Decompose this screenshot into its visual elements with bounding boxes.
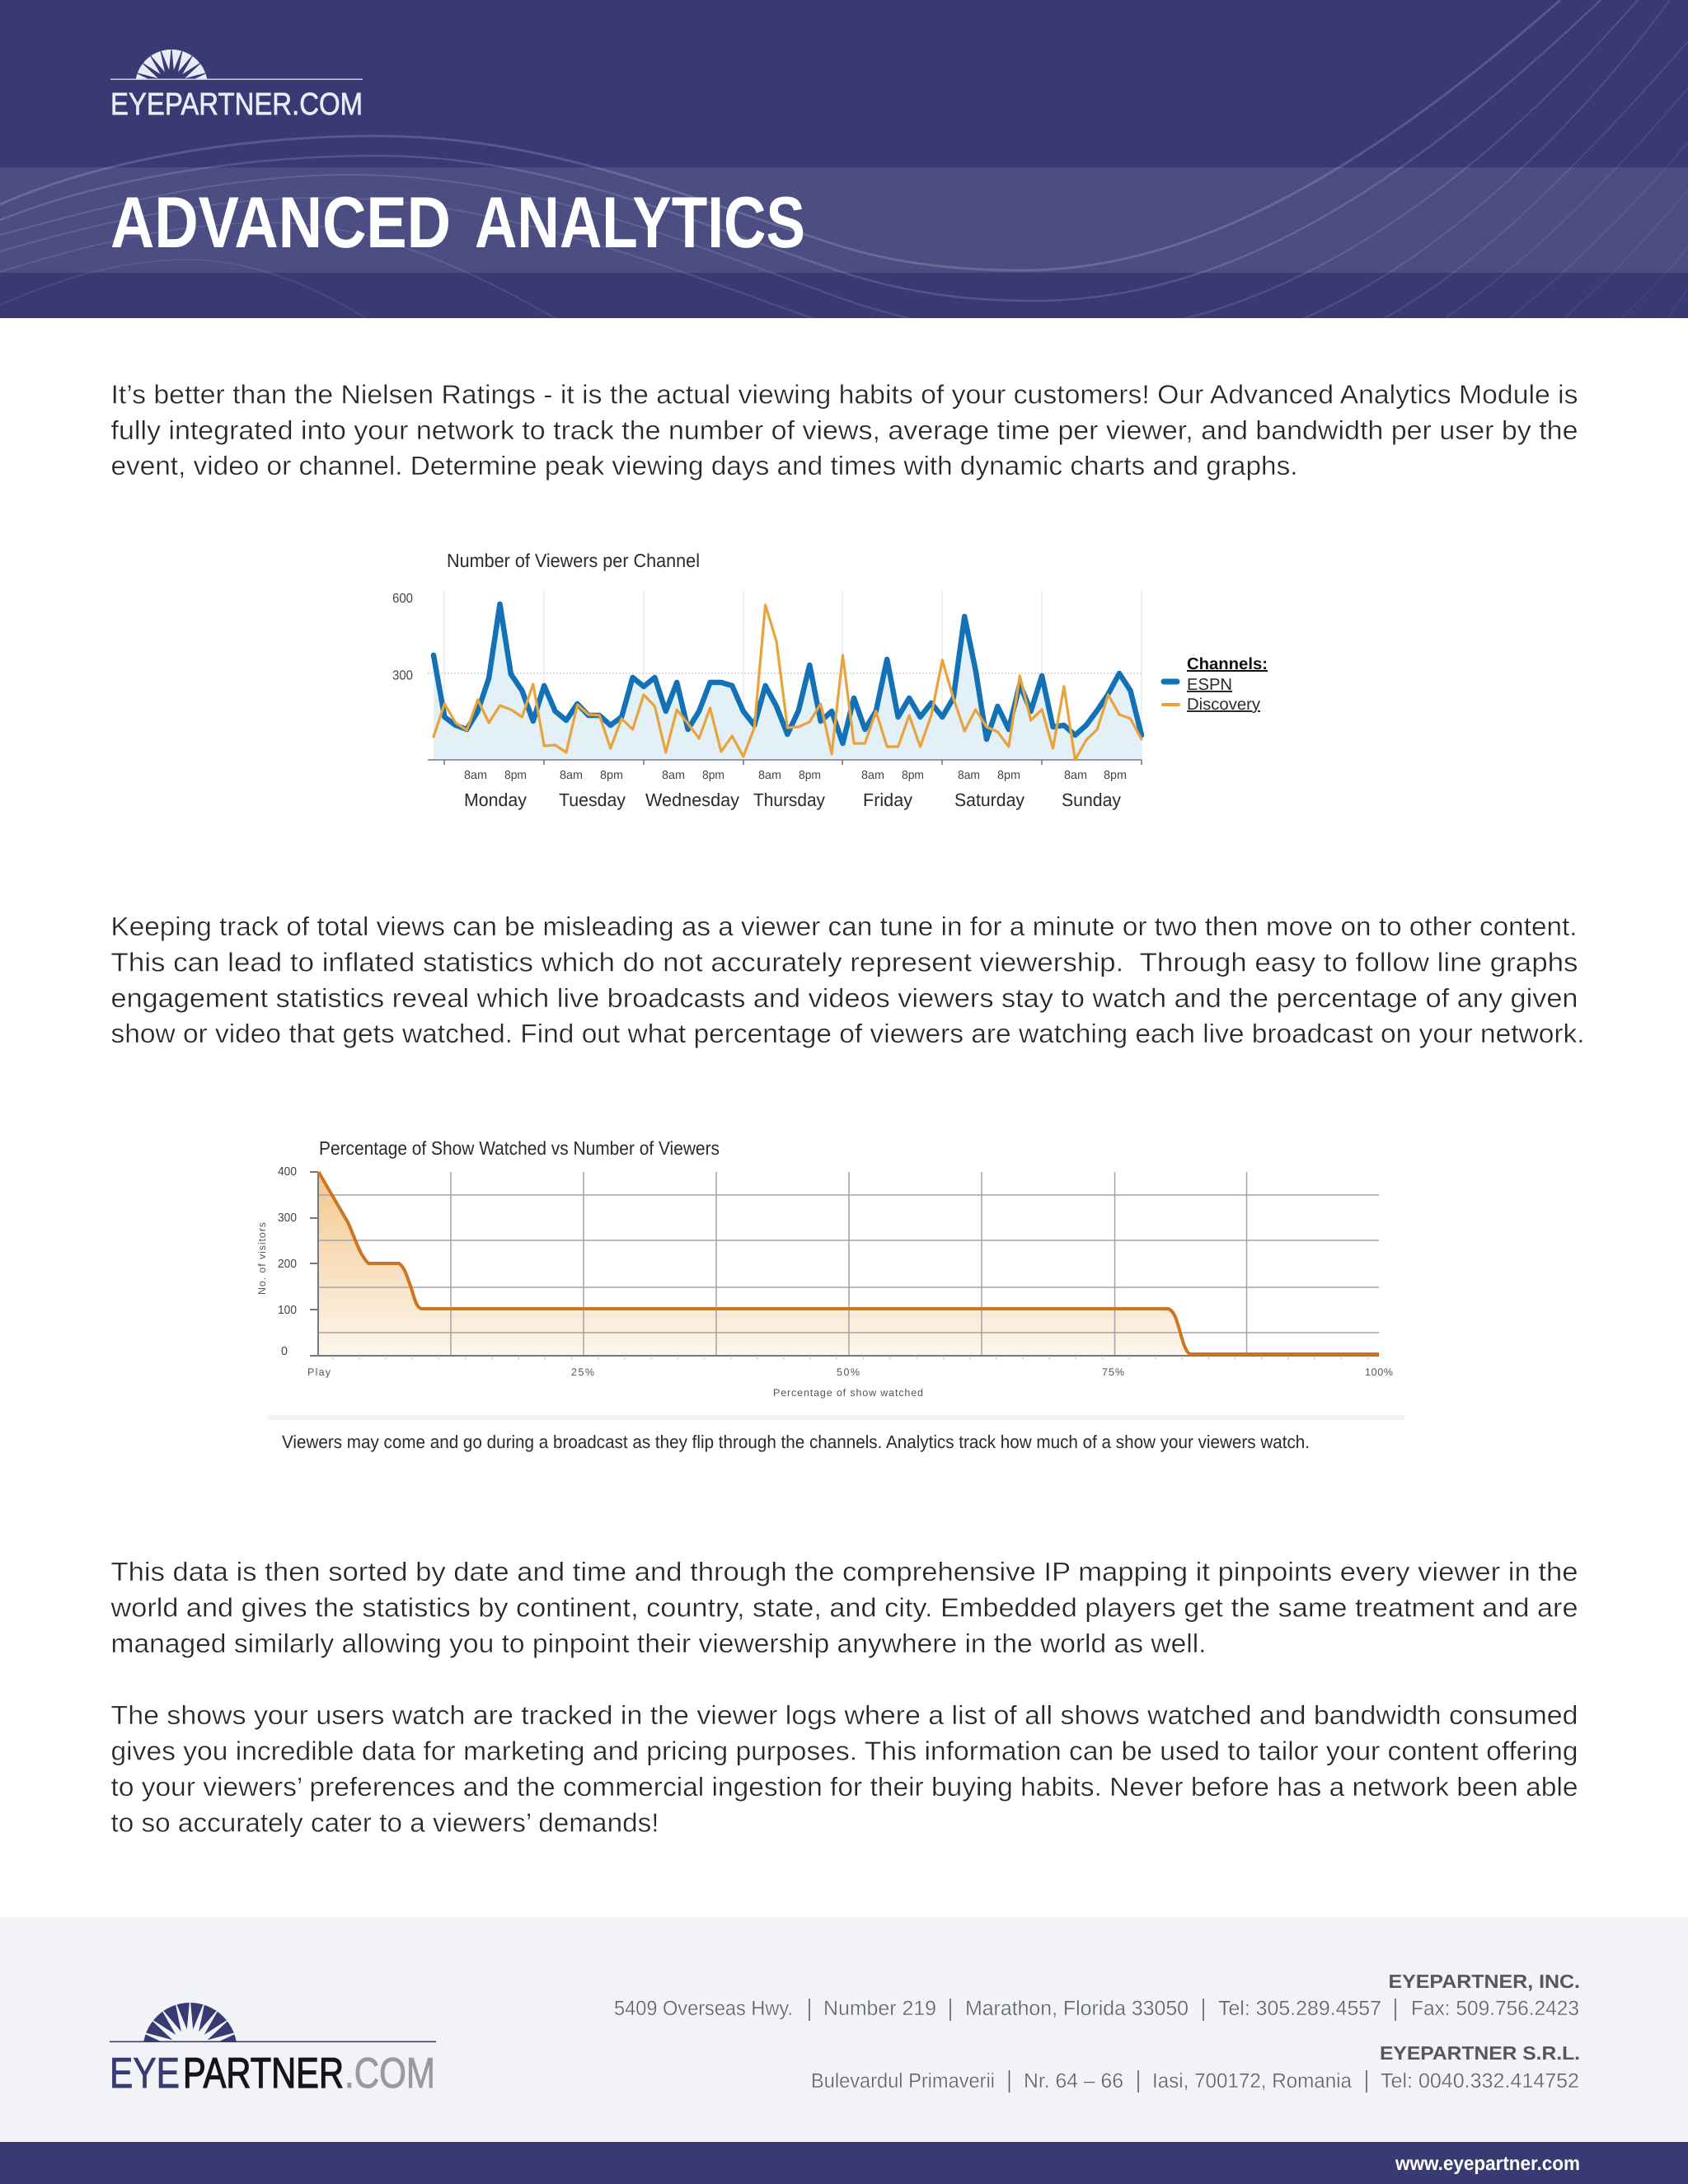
legend: Channels: [1187, 655, 1268, 673]
legend: ESPN [1187, 676, 1232, 694]
hour labels: 8am [464, 769, 487, 782]
y axis labels: 400 [278, 1165, 297, 1179]
text block: engagement paragraph: This can lead to inflated statistics which do not accurately represent viewership. Through easy to follow line graphs [110, 948, 1578, 977]
area chart: percentage of show watched vs number of viewers [256, 1137, 1405, 1452]
area under ESPN line [434, 604, 1142, 760]
footer address: Eyepartner Inc: EYEPARTNER, INC. [1388, 1971, 1580, 1992]
day labels: Tuesday [559, 790, 626, 810]
line chart: number of viewers per channel [392, 550, 1268, 810]
footer address: Eyepartner Inc: Number 219 [823, 1997, 936, 2020]
text block: engagement paragraph: engagement statistics reveal which live broadcasts and videos viewers stay to watch and the percentage of any given [110, 983, 1578, 1013]
header banner [0, 0, 1688, 318]
day labels [464, 790, 1121, 810]
y axis labels: 300 [278, 1212, 297, 1225]
text block: IP mapping paragraph: This data is then sorted by date and time and through the comprehensive IP mapping it pinpoints every viewer in the [110, 1557, 1578, 1586]
title: ANALYTICS [475, 181, 805, 263]
legend [1163, 655, 1268, 714]
hour labels: 8am [758, 769, 781, 782]
text block: IP mapping paragraph: managed similarly allowing you to pinpoint their viewership anywhere in the world as well. [110, 1629, 1207, 1658]
y axis labels: 300 [392, 669, 413, 682]
footer logo [110, 2003, 436, 2097]
footer address: Eyepartner SRL: EYEPARTNER S.R.L. [1380, 2042, 1580, 2064]
header logo [110, 49, 363, 122]
day labels: Wednesday [645, 790, 739, 810]
footer address: Eyepartner SRL: Nr. 64 – 66 [1024, 2069, 1123, 2093]
x axis labels [307, 1366, 1393, 1378]
hour labels: 8pm [997, 769, 1020, 782]
grid [318, 1172, 1379, 1356]
footer address: Eyepartner Inc: Marathon, Florida 33050 [965, 1997, 1189, 2020]
text block: intro paragraph: event, video or channel. Determine peak viewing days and times with dynamic charts and graphs. [110, 451, 1297, 480]
hour labels: 8pm [902, 769, 924, 782]
hour labels: 8am [1064, 769, 1087, 782]
footer logo: .COM [345, 2050, 435, 2097]
footer address: Eyepartner Inc [614, 1971, 1580, 2021]
axis [428, 760, 1142, 765]
footer bar [0, 2142, 1688, 2184]
day labels: Sunday [1062, 790, 1121, 810]
footer address: Eyepartner SRL: Iasi, 700172, Romania [1152, 2069, 1352, 2093]
title: ADVANCED [110, 181, 451, 263]
website link: www.eyepartner.com [1395, 2153, 1580, 2175]
hour labels: 8am [958, 769, 980, 782]
area fill [318, 1172, 1191, 1356]
text block: viewer logs paragraph: to your viewers’ preferences and the commercial ingestion for their buying habits. Never before has a network been able [110, 1772, 1578, 1802]
x axis labels: Play [307, 1366, 331, 1378]
footer address: Eyepartner SRL: Tel: 0040.332.414752 [1381, 2069, 1579, 2093]
text block: intro paragraph: It’s better than the Nielsen Ratings - it is the actual viewing habits of your customers! Our Advanced Analytics Module is [110, 379, 1578, 409]
title [110, 181, 805, 263]
hour labels [464, 769, 1127, 782]
hour labels: 8am [861, 769, 884, 782]
footer address: Eyepartner Inc: Fax: 509.756.2423 [1411, 1997, 1579, 2020]
chart title: Percentage of Show Watched vs Number of Viewers [319, 1137, 720, 1159]
y axis labels [392, 592, 413, 682]
text block: IP mapping paragraph: world and gives the statistics by continent, country, state, and city. Embedded players get the same treatment and are [110, 1592, 1578, 1622]
y axis labels: 0 [281, 1345, 288, 1358]
hour labels: 8pm [600, 769, 623, 782]
footer panel [0, 1917, 1688, 2142]
day labels: Friday [863, 790, 912, 810]
day labels: Thursday [753, 790, 825, 810]
text block: IP mapping paragraph [110, 1557, 1578, 1658]
text block: viewer logs paragraph: gives you incredible data for marketing and pricing purposes. This information can be used to tailor your content offering [110, 1736, 1578, 1765]
footer logo: EYE [110, 2050, 180, 2097]
text block: engagement paragraph: Keeping track of total views can be misleading as a viewer can tune in for a minute or two then move on to other content. [110, 912, 1578, 941]
footer address: Eyepartner Inc: 5409 Overseas Hwy. [614, 1997, 793, 2020]
legend: Discovery [1187, 696, 1260, 714]
line: ESPN [434, 604, 1142, 743]
hour labels: 8pm [702, 769, 724, 782]
chart title: Number of Viewers per Channel [447, 550, 700, 571]
text block: viewer logs paragraph [110, 1700, 1578, 1838]
text block: engagement paragraph [110, 912, 1584, 1048]
footer logo: PARTNER [183, 2050, 344, 2097]
footer address: Eyepartner Inc: Tel: 305.289.4557 [1218, 1997, 1381, 2020]
y axis labels: 200 [278, 1258, 297, 1271]
x axis title: Percentage of show watched [773, 1387, 923, 1399]
hour labels: 8am [662, 769, 685, 782]
day labels: Monday [464, 790, 527, 810]
hour labels: 8pm [504, 769, 527, 782]
text block: viewer logs paragraph: The shows your users watch are tracked in the viewer logs where a list of all shows watched and bandwidth consumed [110, 1700, 1578, 1730]
text block: intro paragraph [110, 379, 1578, 480]
text block: engagement paragraph: show or video that gets watched. Find out what percentage of viewers are watching each live broadcast on your network. [110, 1019, 1584, 1048]
x axis labels: 50% [837, 1366, 860, 1378]
hour labels: 8pm [1104, 769, 1127, 782]
x axis labels: 75% [1102, 1366, 1124, 1378]
hour labels: 8am [560, 769, 583, 782]
x axis labels: 100% [1365, 1366, 1393, 1378]
y axis labels: 600 [392, 592, 413, 606]
line: viewers [318, 1172, 1379, 1354]
line: Discovery [434, 605, 1142, 760]
footer address: Eyepartner SRL: Bulevardul Primaverii [811, 2069, 995, 2093]
chart caption: Viewers may come and go during a broadcast as they flip through the channels. Analytics track how much of a show your viewers watch. [282, 1432, 1310, 1452]
hour labels: 8pm [799, 769, 821, 782]
y axis labels [278, 1165, 297, 1358]
day labels: Saturday [954, 790, 1025, 810]
header logo: EYEPARTNER.COM [110, 87, 363, 122]
y axis labels: 100 [278, 1304, 297, 1317]
axes [310, 1172, 1379, 1356]
y axis title: No. of visitors [256, 1222, 268, 1295]
axis ticks [332, 1357, 1379, 1359]
x axis labels: 25% [571, 1366, 594, 1378]
text block: intro paragraph: fully integrated into your network to track the number of views, average time per viewer, and bandwidth per user by the [110, 415, 1578, 445]
text block: viewer logs paragraph: to so accurately cater to a viewers’ demands! [110, 1808, 659, 1838]
footer address: Eyepartner SRL [811, 2042, 1580, 2093]
